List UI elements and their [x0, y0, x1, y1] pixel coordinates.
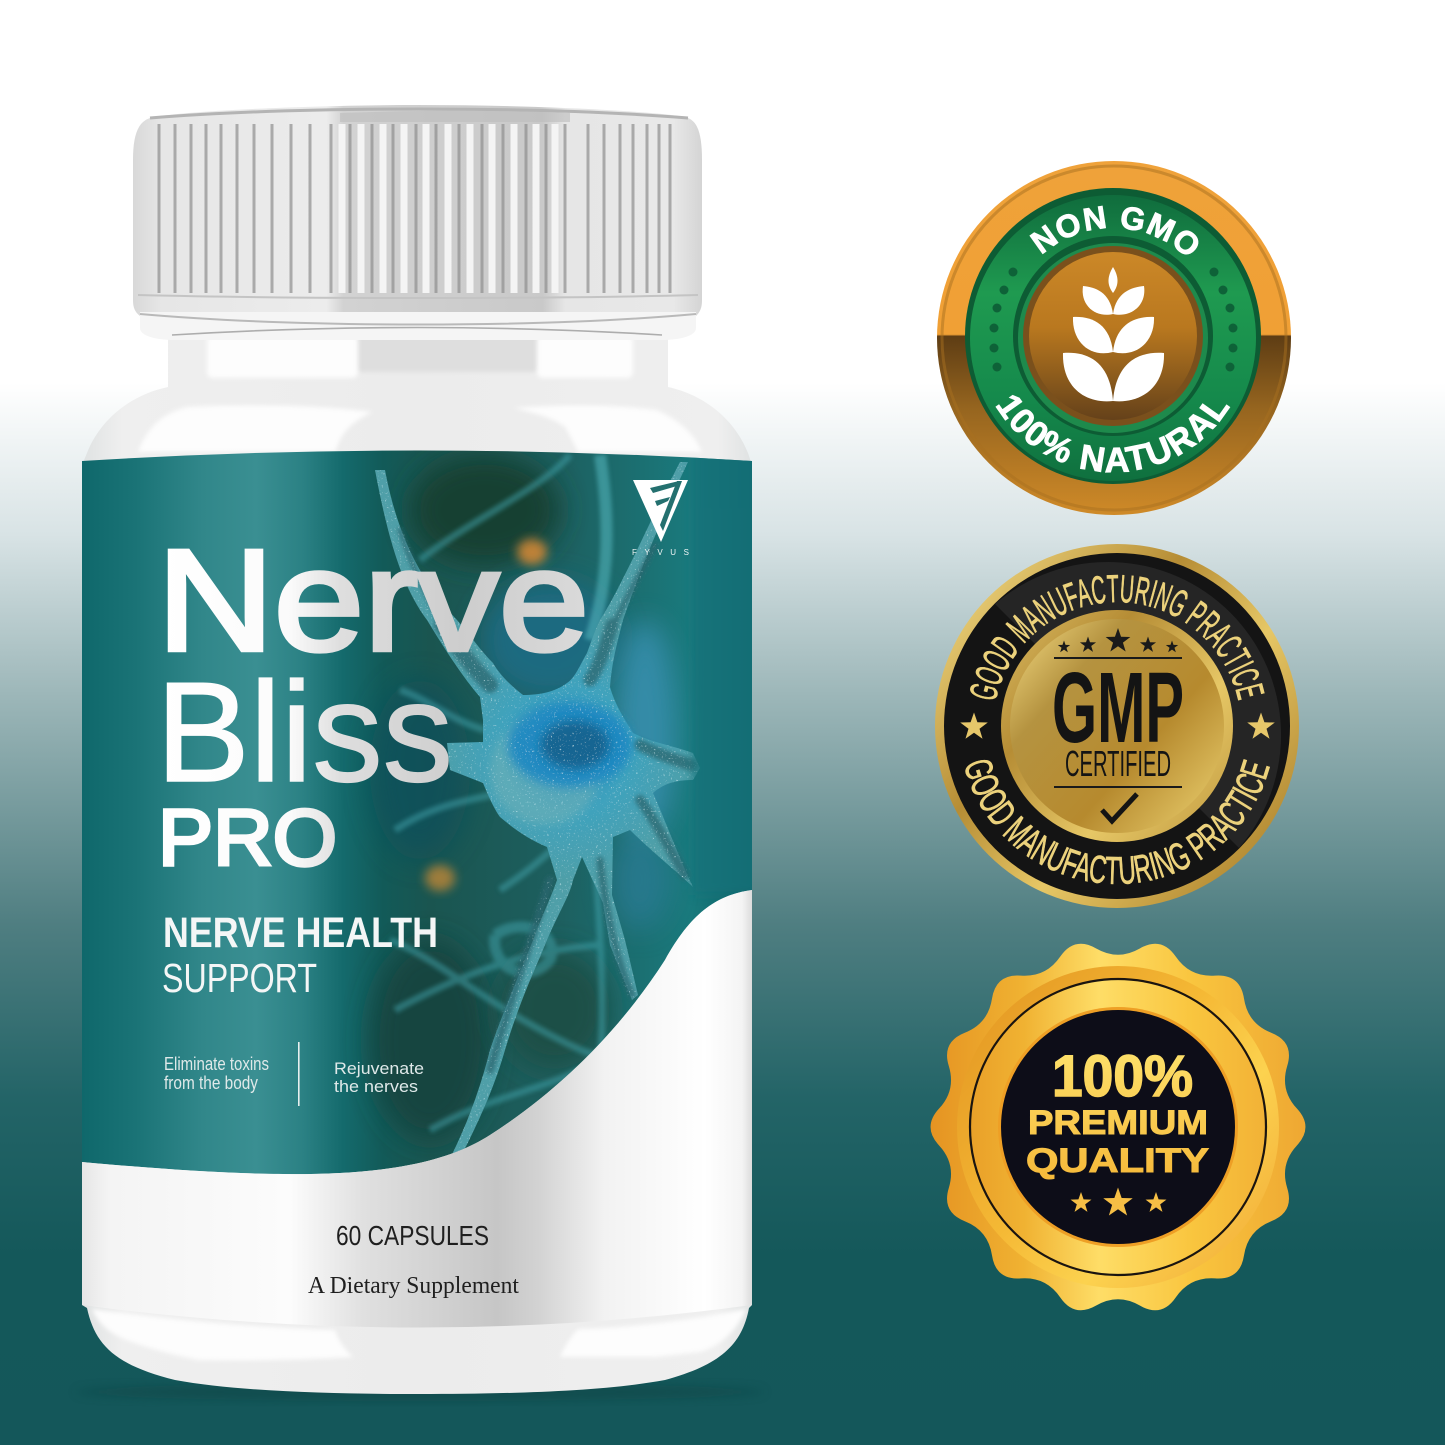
glowing orange spots [517, 539, 547, 565]
certified: CERTIFIED [1065, 743, 1171, 784]
benefit: rejuvenate [334, 1059, 424, 1096]
neck highlights [207, 328, 633, 378]
product name [156, 520, 589, 882]
dark green depth [410, 455, 560, 565]
product name: Bliss [156, 653, 453, 812]
label teal field [82, 450, 752, 1174]
cell body colour [490, 715, 600, 825]
icon: wheat leaves [1063, 267, 1164, 401]
benefit: rejuvenate: the nerves [334, 1077, 418, 1096]
dendrite cores [400, 530, 692, 1070]
badge: GMP certified [935, 544, 1299, 908]
bottle shadow [75, 1383, 765, 1401]
background fibres [390, 455, 640, 1130]
ring text: GOOD MANUFACTURING PRACTICE [965, 759, 1270, 884]
bottle body [82, 322, 752, 1394]
badge: non GMO [937, 161, 1291, 515]
subtitle: NERVE HEALTH [163, 909, 438, 957]
product bottle [75, 105, 765, 1401]
top stars [1058, 628, 1178, 652]
product name: Nerve [157, 520, 589, 681]
quality text: QUALITY [1026, 1142, 1209, 1180]
quality text: 100% [1052, 1044, 1193, 1109]
supplement note: A Dietary Supplement [308, 1273, 519, 1299]
brand logo [632, 480, 689, 557]
benefit: eliminate toxins: from the body [164, 1073, 258, 1093]
badge: premium quality [931, 944, 1305, 1310]
shoulder highlights [138, 405, 702, 452]
ring text: GOOD MANUFACTURING PRACTICE [970, 574, 1265, 700]
brand logo: FYVUS [632, 548, 689, 557]
benefit: eliminate toxins [164, 1054, 269, 1093]
base highlights [92, 1309, 746, 1360]
product name: PRO [158, 793, 337, 882]
dots [990, 268, 1238, 372]
subtitle [162, 909, 438, 1001]
subtitle: SUPPORT [162, 955, 317, 1001]
benefit: rejuvenate: Rejuvenate [334, 1059, 424, 1078]
GMP wordmark: GMP [1052, 652, 1184, 764]
ring text: NON GMO [1029, 206, 1198, 254]
benefit: eliminate toxins: Eliminate toxins [164, 1054, 269, 1074]
neuron artwork [370, 445, 762, 1162]
neuron cell [375, 462, 700, 1162]
quality text [1026, 1044, 1209, 1180]
white lower label [82, 890, 752, 1328]
ring text [996, 206, 1230, 473]
icon: check mark [1102, 794, 1137, 821]
side stars [960, 712, 1275, 739]
ring text: 100% NATURAL [996, 394, 1230, 473]
right edge fade [692, 445, 762, 895]
quality text: PREMIUM [1028, 1104, 1208, 1142]
stars [1071, 1188, 1166, 1216]
ring text [965, 574, 1270, 884]
neck collar [140, 312, 696, 340]
capsule count: 60 CAPSULES [336, 1220, 489, 1251]
cap [133, 105, 702, 316]
